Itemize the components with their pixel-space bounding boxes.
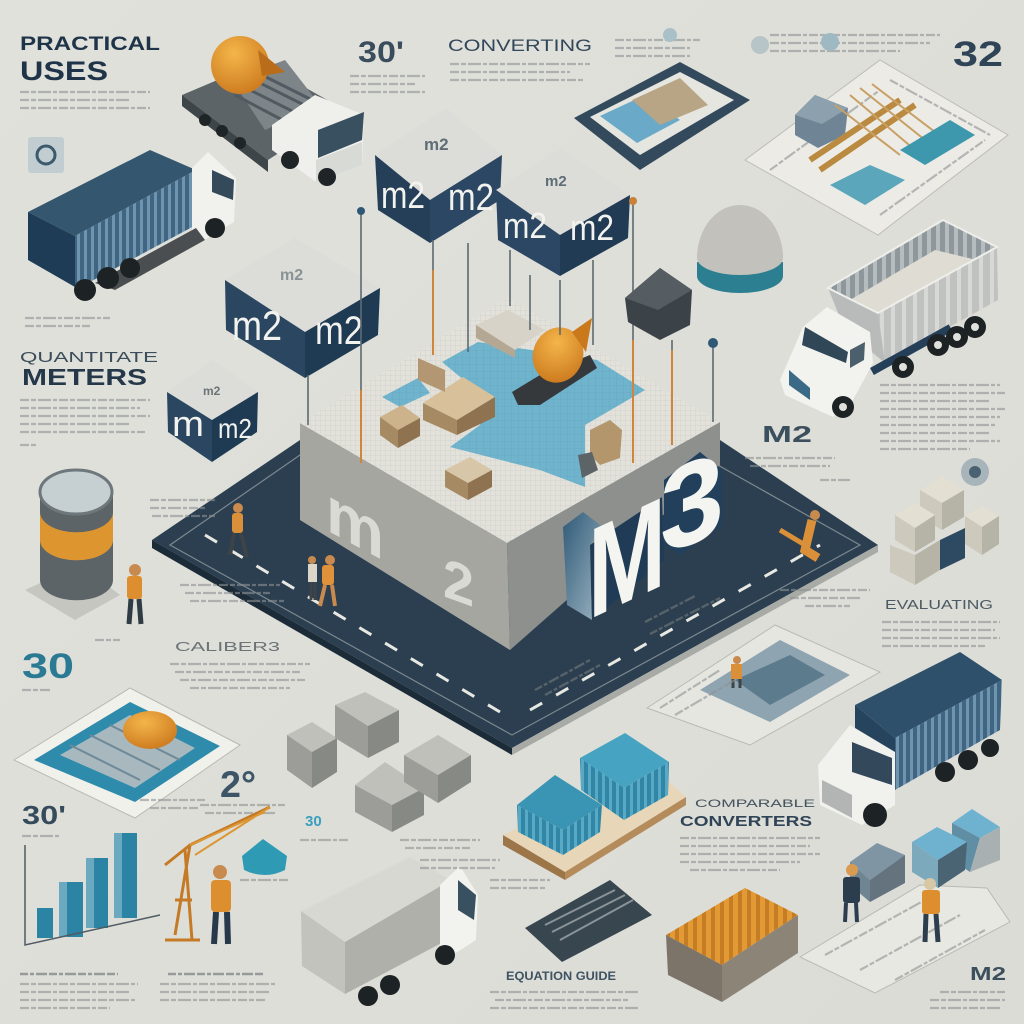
heading: evaluating: EVALUATING (885, 597, 993, 612)
map with orange dome (14, 688, 240, 818)
heading: quantitate meters: METERS (22, 364, 147, 390)
cube: m2 middle left: m2 (280, 267, 303, 284)
tank with worker left (25, 470, 142, 624)
cube: m2 top centre-right: m2 (503, 205, 547, 246)
truck: blue container left (28, 150, 236, 301)
small top right captions (615, 28, 940, 56)
icon: round gear (961, 458, 989, 486)
number: 30 left (22, 640, 120, 690)
heading: practical uses (20, 34, 160, 108)
cube: m2 top centre-left: m2 (381, 175, 425, 217)
cube: m2 middle left: m2 (315, 309, 363, 353)
number: 32 top right: 32 (953, 35, 1003, 74)
crates on the roof (380, 310, 622, 500)
big M3 lettering (563, 425, 724, 648)
text block: right middle (880, 385, 1005, 449)
number: 30 lower left: 30' (22, 800, 66, 830)
text block: centre right (780, 590, 870, 606)
cube: m2 middle left (225, 238, 380, 378)
concrete building block (300, 297, 720, 650)
label: m2 bottom right: M2 (970, 964, 1006, 984)
label: m2 right: M2 (762, 421, 812, 447)
truck: grey dump right (780, 220, 998, 418)
label: m2 bottom right (930, 964, 1006, 1008)
road base (152, 440, 878, 755)
truck: white box bottom centre (301, 857, 478, 1006)
concrete cubes (287, 692, 471, 832)
pallet of blue containers (503, 733, 686, 880)
dark hexagonal marker (625, 268, 692, 340)
truck: flatbed with orange dome (182, 36, 364, 186)
cube: m2 lower left: m2 (218, 413, 252, 444)
water pool (442, 342, 645, 487)
heading: comparable conversions: COMPARABLE (695, 798, 815, 810)
cube: m2 top centre-left: m2 (448, 177, 494, 219)
block left face (300, 423, 510, 650)
icon: teal dome and label: 30 (305, 813, 322, 830)
heading: converting (448, 36, 592, 80)
cube: m2 lower left (167, 360, 258, 462)
icon: badge left (28, 137, 64, 173)
cube: m2 middle left: m2 (232, 302, 282, 349)
heading: converting: CONVERTING (448, 36, 592, 55)
blueprint with block and nets: top right (745, 60, 1008, 235)
flat map: top centre (574, 62, 750, 170)
cube: m2 top centre-left: m2 (424, 135, 449, 154)
cube: m2 top centre-left (375, 108, 502, 243)
bottom caption middle left (160, 974, 275, 1000)
boat with orange dome (512, 318, 597, 405)
bar chart (25, 833, 160, 945)
big M3 lettering: 3 (660, 425, 724, 580)
heading: master text: CALIBER3 (175, 639, 280, 654)
number: 2: 2° (220, 764, 256, 805)
cube: m2 top centre-right (496, 148, 630, 276)
heading: evaluating (882, 597, 1000, 646)
crane with worker (165, 807, 270, 944)
block right face (507, 422, 720, 650)
number: 30 left: 30 (22, 647, 74, 686)
heading: quantitate meters (20, 318, 158, 432)
heading: master text (170, 639, 310, 688)
heading: comparable conversions: CONVERTERS (680, 813, 812, 830)
orange-roofed container (666, 888, 798, 1002)
heading: comparable conversions (680, 798, 820, 870)
cube: m2 lower left: m2 (203, 384, 221, 398)
small pool left (382, 378, 430, 407)
number: 2 (200, 764, 285, 813)
support poles (308, 197, 718, 463)
cube: m2 top centre-right: m2 (545, 173, 567, 190)
block top face (300, 297, 720, 543)
number: 30 lower left (22, 800, 205, 836)
cube: m2 lower left: m (172, 403, 204, 444)
truck: blue container lower right (818, 652, 1002, 827)
text block: left middle (20, 445, 285, 601)
workers on road (230, 503, 820, 606)
label: m2 right (745, 421, 850, 480)
number: 30 top (350, 36, 425, 92)
text block: centre under cubes (400, 840, 550, 888)
concrete building block: 2 (443, 547, 474, 620)
heading: practical uses: PRACTICAL (20, 34, 160, 55)
left face lettering: m (326, 470, 384, 575)
road side captions (535, 596, 720, 695)
bottom caption left (20, 974, 138, 1008)
map with worker right (647, 625, 880, 745)
bottom caption centre (490, 969, 640, 1008)
heading: quantitate meters: QUANTITATE (20, 349, 158, 366)
blueprint with workers and cubes bottom right (800, 809, 1010, 993)
number: 30 top: 30' (358, 36, 404, 69)
dome sphere (697, 205, 783, 293)
cube stack right (890, 476, 999, 585)
cube: m2 top centre-right: m2 (570, 207, 614, 248)
dark grate (525, 880, 652, 962)
heading: practical uses: USES (20, 56, 108, 86)
icon: teal dome and label (240, 813, 350, 880)
big M3 lettering: M (588, 468, 666, 648)
bottom caption centre: EQUATION GUIDE (506, 969, 616, 983)
